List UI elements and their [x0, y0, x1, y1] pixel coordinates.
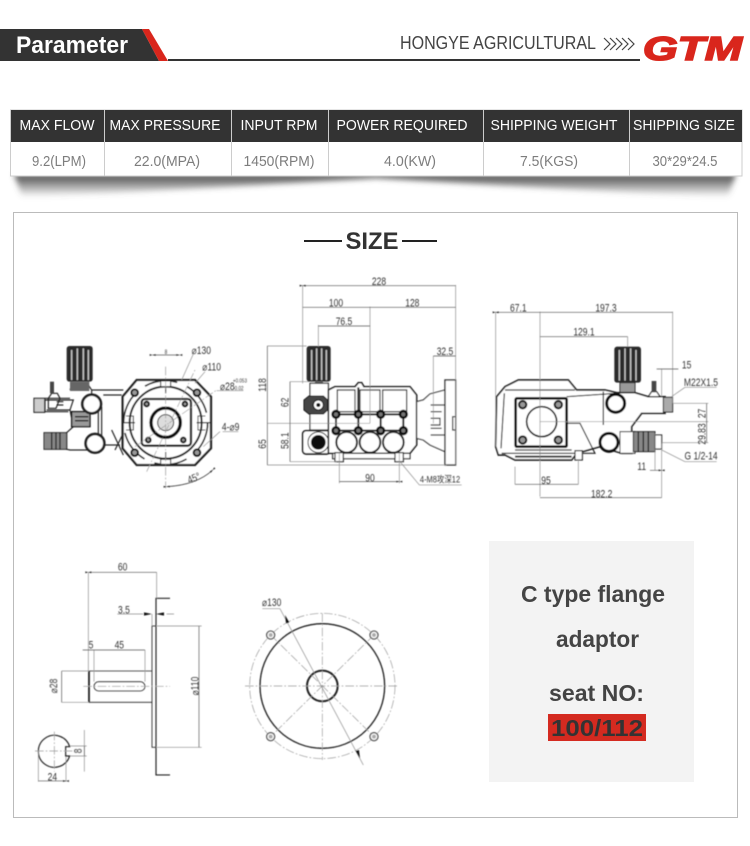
dimensions: 67.1 [510, 302, 527, 315]
dimensions: ⌀28 [48, 679, 61, 693]
knob [50, 346, 93, 393]
panel: size [14, 212, 738, 818]
column: shipping size: SHIPPING SIZE [633, 117, 735, 134]
column: max pressure [110, 117, 220, 170]
logo: GTM: GTM [643, 30, 744, 67]
column: max flow: 9.2(LPM) [32, 153, 86, 170]
dimensions: 32.5 [437, 346, 453, 358]
parameter table shadow [14, 174, 736, 197]
dimensions: 65 [257, 439, 269, 449]
heading: Parameter [0, 29, 168, 61]
drawing: pump rear view [496, 302, 718, 501]
column: input rpm [240, 117, 318, 170]
shaft and plate [83, 598, 170, 775]
dimensions: 4-M8攻深12 [420, 474, 460, 485]
column: power required [336, 117, 468, 170]
callout: C type flange adaptor [489, 541, 694, 782]
dimensions: -0.02 [233, 386, 244, 392]
column: power required: 4.0(KW) [384, 153, 436, 170]
heading: SIZE [304, 228, 437, 255]
dimensions: 128 [405, 297, 419, 310]
callout: C type flange adaptor: adaptor [556, 626, 639, 652]
dimensions: ⌀110 [189, 677, 202, 695]
dimensions: 129.1 [573, 326, 595, 339]
column: shipping size: 30*29*24.5 [652, 153, 718, 170]
column: shipping weight: SHIPPING WEIGHT [490, 117, 618, 134]
dimensions: 11 [637, 461, 646, 473]
flange [123, 380, 211, 465]
callout: C type flange adaptor: C type flange [521, 581, 665, 607]
column: input rpm: 1450(RPM) [244, 153, 314, 170]
dimensions: 3.5 [118, 604, 130, 617]
drawing: pump front view [34, 345, 247, 488]
heading: SIZE: SIZE [346, 228, 398, 255]
dimensions: 62 [280, 398, 292, 407]
dimensions: ⌀110 [202, 362, 221, 374]
dimensions [38, 562, 202, 784]
dimensions: 5 [89, 639, 93, 652]
seat number badge: 100/112 [551, 715, 643, 741]
dimensions: 90 [365, 472, 375, 485]
column: shipping size [633, 117, 735, 170]
dimensions: 4-⌀9 [222, 422, 239, 434]
dimensions: 228 [372, 276, 386, 288]
column: power required: POWER REQUIRED [336, 117, 468, 134]
dimensions: 27 [697, 409, 709, 418]
parameter table [10, 110, 742, 176]
dimensions: 45 [115, 639, 124, 652]
dimensions: 100 [329, 297, 343, 310]
callout: C type flange adaptor: seat NO: [549, 680, 644, 706]
dimensions: ⌀28 [220, 381, 235, 393]
dimensions: 24 [48, 772, 58, 784]
column: input rpm: INPUT RPM [240, 117, 318, 134]
dimensions: 60 [118, 562, 127, 574]
dimensions: 8 [73, 749, 85, 753]
dimensions: +0.053 [233, 378, 247, 385]
dimensions: 118 [257, 378, 269, 392]
pump body [496, 380, 673, 460]
table header row [11, 110, 742, 142]
column: max pressure: MAX PRESSURE [110, 117, 220, 134]
column: max pressure: 22.0(MPA) [134, 153, 200, 170]
dimensions: ⌀130 [192, 345, 211, 357]
header rule [168, 59, 640, 61]
dimensions: 29.83 [697, 423, 709, 445]
drawing: flange front view: ⌀130 [262, 597, 281, 609]
pump body [303, 380, 456, 465]
drawing: flange front view [245, 597, 398, 765]
dimensions: G 1/2-14 [684, 450, 718, 463]
dimensions [496, 302, 718, 501]
knob [307, 346, 331, 391]
ports [44, 395, 104, 453]
dimensions: M22X1.5 [684, 377, 718, 389]
dimensions [135, 345, 247, 488]
header band [0, 29, 744, 67]
column: max flow [20, 117, 95, 170]
heading: Parameter: Parameter [16, 32, 128, 59]
dimensions: 45° [186, 471, 203, 487]
column: max flow: MAX FLOW [20, 117, 95, 134]
shaft end view [35, 732, 75, 772]
dimensions: 182.2 [591, 488, 612, 501]
column: shipping weight [490, 117, 618, 170]
dimensions: 76.5 [336, 316, 352, 328]
dimensions: 8 [165, 350, 167, 356]
company name: HONGYE AGRICULTURAL [400, 33, 596, 53]
dimensions: 15 [682, 359, 691, 372]
icon: chevrons [604, 38, 634, 50]
dimensions: 197.3 [595, 302, 617, 315]
drawing: pump side view [257, 276, 462, 485]
column: shipping weight: 7.5(KGS) [520, 153, 578, 170]
dimensions: 58.1 [280, 432, 292, 449]
dimensions [257, 276, 462, 485]
drawing: shaft side view [35, 562, 202, 784]
knob [614, 347, 641, 393]
dimensions: 95 [541, 475, 551, 487]
